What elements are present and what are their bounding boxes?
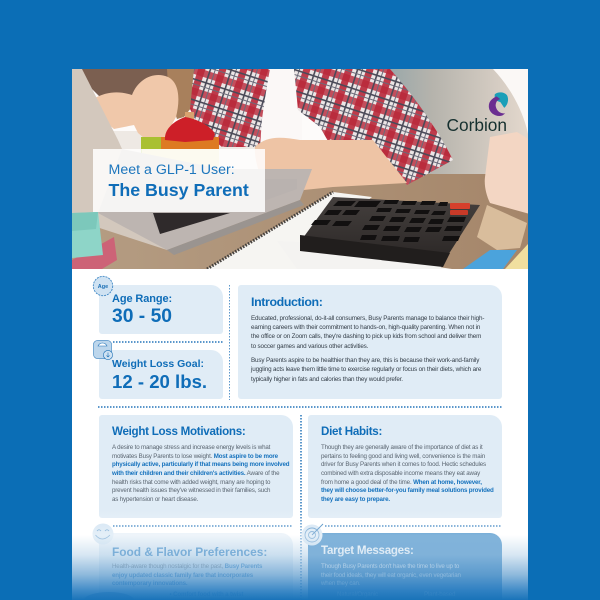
icon: food photo circle xyxy=(84,592,134,600)
panel: food and flavor preferences xyxy=(98,533,292,600)
notebook xyxy=(207,192,452,269)
target text: when they can. xyxy=(321,580,360,587)
target text: their food ideals, they will eat organic, even vegetarian xyxy=(321,572,461,579)
panel: weight loss motivations xyxy=(98,415,292,518)
target text: Though Busy Parents don't have the time to live up to xyxy=(321,563,459,570)
introduction paragraph 1: Educated, professional, do-it-all consumers, Busy Parents manage to balance their high- xyxy=(251,315,484,322)
panel: age range xyxy=(98,285,222,334)
diet text: driver for Busy Parents when it comes to food. Hectic schedules xyxy=(321,461,486,468)
icon: age xyxy=(92,276,114,296)
panel: introduction xyxy=(238,285,502,399)
icon: smiling face xyxy=(92,524,114,544)
child's left hand and forearm xyxy=(93,75,178,143)
diet text: combined with extra disposable income means they eat away xyxy=(321,470,480,477)
yellow toy xyxy=(505,244,528,269)
icon: target xyxy=(302,524,324,546)
introduction paragraph 2: Busy Parents aspire to be healthier than they are, this is because their work-and-family xyxy=(251,357,479,364)
background wall xyxy=(390,69,528,179)
age label: Age Range: xyxy=(112,292,172,304)
motivations heading: Weight Loss Motivations: xyxy=(112,425,245,438)
motivations text: prevent health issues they've witnessed in their families, such xyxy=(112,487,270,494)
title panel xyxy=(93,149,265,212)
adult hand xyxy=(485,132,530,214)
icon: age: Age xyxy=(98,284,108,290)
diet text: pertains to feeling good and living well, convenience is the main xyxy=(321,453,485,460)
target item: natural: Natural/Organic xyxy=(337,591,378,598)
divider xyxy=(325,525,502,526)
food text: Health-aware though nostalgic for the past, Busy Parents xyxy=(112,563,262,570)
age value: 30 - 50 xyxy=(112,306,172,327)
introduction paragraph 1: earning careers with their commitment to hands-on, high-quality parenting. When not in xyxy=(251,324,480,331)
target heading: Target Messages: xyxy=(321,544,414,557)
title line 1: Meet a GLP-1 User: xyxy=(108,162,235,178)
wood block xyxy=(477,205,527,250)
introduction paragraph 1: the office or on Zoom calls, they're dashing to pick up kids from school and deliver them xyxy=(251,333,481,340)
calculator xyxy=(277,197,480,269)
introduction paragraph 2: juggling acts leave them little time to exercise regularly or focus on their diets, which are xyxy=(251,366,481,373)
goal label: Weight Loss Goal: xyxy=(112,358,204,370)
target text xyxy=(321,563,461,587)
motivations text: A desire to manage stress and increase energy levels is what xyxy=(112,444,270,451)
hair xyxy=(167,69,210,119)
diet heading: Diet Habits: xyxy=(321,425,382,438)
hero photo: child with blocks, laptop and calculator xyxy=(72,69,528,269)
motivations text: as hypertension or heart disease. xyxy=(112,496,198,503)
white page sheet xyxy=(72,69,528,600)
laptop base xyxy=(98,149,312,250)
bottom fade overlay xyxy=(72,510,528,600)
diet text: they will choose better-for-you family meal solutions provided xyxy=(321,487,494,494)
blue toy xyxy=(463,250,517,269)
teal and pink toy blocks xyxy=(72,237,117,269)
motivations text: health risks that come with added weight, many are hoping to xyxy=(112,479,270,486)
panel: weight loss goal xyxy=(98,350,222,399)
introduction paragraph 1: to soccer games and various other activities. xyxy=(251,343,368,350)
divider xyxy=(300,415,302,600)
white shirt xyxy=(258,69,302,144)
icon: scale xyxy=(93,340,113,360)
plaid shirt left xyxy=(190,69,270,147)
logo wordmark: Corbion xyxy=(446,115,507,135)
plaid sleeve right xyxy=(294,69,453,185)
Corbion logo xyxy=(446,92,508,135)
panel: diet habits xyxy=(308,415,502,518)
laptop lid xyxy=(72,69,167,250)
divider xyxy=(113,341,223,342)
introduction heading: Introduction: xyxy=(251,295,322,309)
child's right hand and arm xyxy=(255,138,407,191)
food bullet: • Comfort food with a twist xyxy=(170,591,243,598)
motivations text xyxy=(112,444,290,503)
title line 2: The Busy Parent xyxy=(108,180,249,200)
wooden blocks xyxy=(141,112,219,167)
divider xyxy=(98,406,502,408)
food text: enjoy updated classic family fare that incorporates xyxy=(112,572,253,579)
introduction paragraph 2: typically higher in fats and calories than they would prefer. xyxy=(251,376,403,383)
diet text: Though they are generally aware of the importance of diet as it xyxy=(321,444,483,451)
food text: contemporary innovations. xyxy=(112,580,187,587)
paper behind blocks xyxy=(112,131,302,181)
diet text: from home a good deal of the time. When at home, however, xyxy=(321,479,482,486)
motivations text: physically active, particularly if that means being more involved xyxy=(112,461,289,468)
introduction paragraph 2 xyxy=(250,357,482,383)
goal value: 12 - 20 lbs. xyxy=(112,371,207,392)
food text xyxy=(112,563,262,587)
introduction paragraph 1 xyxy=(251,315,484,350)
target item: plant based: Plant-based xyxy=(424,591,455,598)
divider xyxy=(228,285,230,400)
diet text: they are easy to prepare. xyxy=(321,496,390,503)
food heading: Food & Flavor Preferences: xyxy=(112,545,267,559)
logo mark xyxy=(488,92,508,116)
table xyxy=(72,174,528,269)
diet text xyxy=(321,444,494,503)
motivations text: motivates Busy Parents to lose weight. Most aspire to be more xyxy=(112,453,278,460)
panel: target messages xyxy=(308,533,502,600)
motivations text: with their children and their children's activities. Aware of the xyxy=(112,470,279,477)
divider xyxy=(113,525,292,526)
